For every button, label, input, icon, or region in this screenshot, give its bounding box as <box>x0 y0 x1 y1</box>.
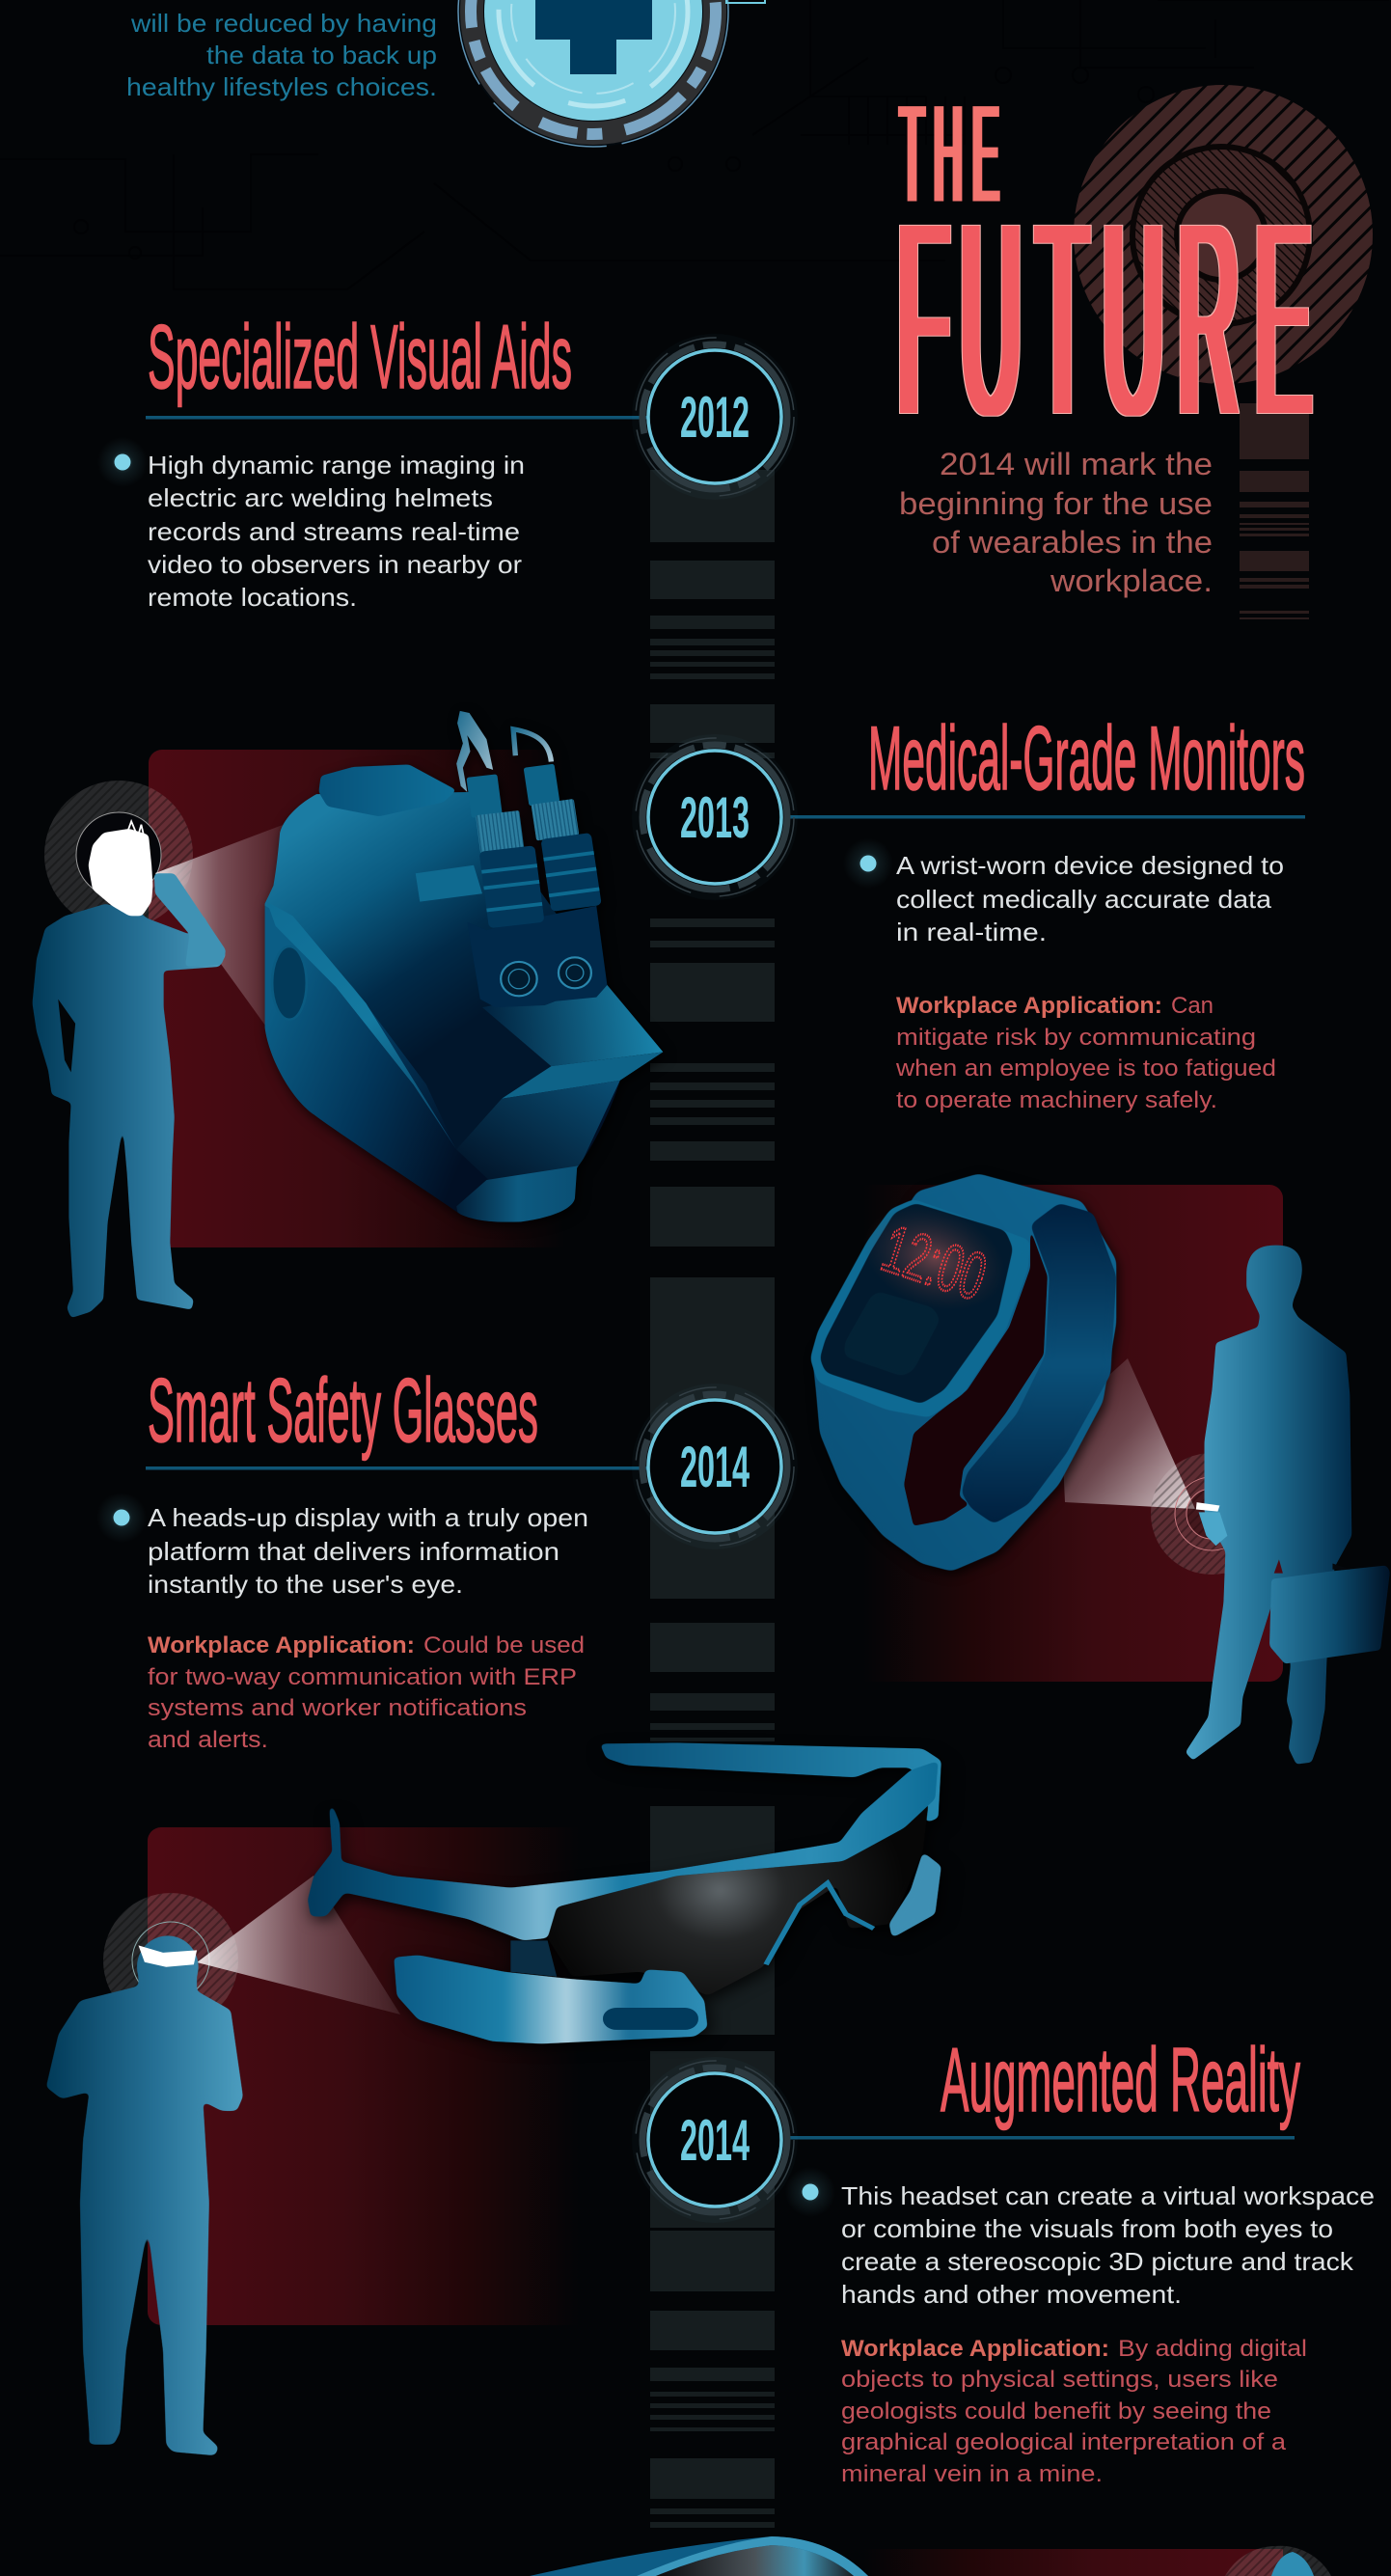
workplace application text: Workplace Application: <box>148 1632 415 1658</box>
body text: instantly to the user's eye. <box>148 1570 463 1599</box>
nose plate <box>482 983 663 1066</box>
panel: bottom red background <box>863 2549 1283 2576</box>
silhouette <box>46 1935 243 2455</box>
display arm <box>394 1955 707 2043</box>
year badge 2014 <box>632 1384 798 1549</box>
workplace application text <box>841 2336 1307 2487</box>
future hatched circle graphic <box>1074 85 1373 384</box>
helmet shell facets <box>259 788 663 1231</box>
section: smart safety glasses <box>96 1359 798 1753</box>
band inner hole <box>904 1228 1048 1526</box>
section: specialized visual aids <box>97 306 798 612</box>
timeline column stripes <box>650 470 775 2528</box>
collar <box>456 1165 579 1226</box>
bullet <box>785 2167 835 2217</box>
section: medical-grade monitors <box>632 707 1305 1113</box>
future intro text: workplace. <box>1050 563 1213 598</box>
watch face <box>820 1203 1013 1404</box>
right cable <box>513 729 551 761</box>
body text: create a stereoscopic 3D picture and track <box>841 2247 1354 2276</box>
light beam to glasses <box>197 1876 400 2014</box>
frame <box>308 1761 939 1940</box>
year badge 2013: 2013 <box>680 785 750 850</box>
light beam to helmet <box>155 825 283 1029</box>
section: smart safety glasses: Smart Safety Glasses <box>148 1359 538 1461</box>
display glow <box>851 1189 1019 1329</box>
lens <box>548 1799 929 1996</box>
workplace application text: Workplace Application: <box>841 2336 1109 2362</box>
body text: remote locations. <box>148 583 357 612</box>
workplace application text: and alerts. <box>148 1727 268 1753</box>
year badge 2013 <box>632 734 798 900</box>
bullet <box>97 437 148 487</box>
body text: hands and other movement. <box>841 2280 1182 2309</box>
panel: glasses red background <box>148 1827 579 2325</box>
top text block: the data to back up <box>206 41 437 69</box>
connector rule <box>786 2136 1295 2140</box>
bracket <box>467 906 607 1007</box>
workplace application text <box>895 993 1276 1113</box>
workplace application text <box>148 1632 585 1753</box>
workplace application text: Workplace Application: <box>896 993 1162 1019</box>
workplace application text: geologists could benefit by seeing the <box>841 2398 1271 2425</box>
person with glasses illustration <box>46 1876 400 2455</box>
workplace application text: objects to physical settings, users like <box>841 2367 1278 2393</box>
future intro text: of wearables in the <box>932 525 1213 560</box>
body text: This headset can create a virtual workspace <box>841 2181 1375 2210</box>
arm slot <box>603 2008 698 2030</box>
body text: platform that delivers information <box>148 1537 559 1566</box>
workplace application text: By adding digital <box>1118 2336 1307 2362</box>
body text: in real-time. <box>896 918 1047 946</box>
panel: watch red background <box>863 1185 1283 1682</box>
body text: electric arc welding helmets <box>148 483 493 512</box>
light beam to watch <box>1061 1358 1195 1509</box>
welding helmet illustration <box>259 711 663 1231</box>
year badge 2014: 2014 <box>680 2108 750 2173</box>
connector rule <box>146 1466 647 1470</box>
side dial <box>272 946 307 1020</box>
person with welding helmet illustration <box>32 781 283 1318</box>
ridge <box>267 902 456 1149</box>
right camera barrel <box>524 760 602 913</box>
body text: High dynamic range imaging in <box>148 451 525 480</box>
chin <box>456 1081 620 1182</box>
year badge 2012 <box>632 334 798 500</box>
body text: A heads-up display with a truly open <box>148 1503 588 1532</box>
safety glasses illustration <box>308 1742 941 2043</box>
focus ring <box>1151 1453 1272 1575</box>
section: augmented reality <box>632 2029 1375 2487</box>
left cable <box>456 711 493 792</box>
strap <box>416 865 482 902</box>
workplace application text: mineral vein in a mine. <box>841 2461 1103 2487</box>
body text: video to observers in nearby or <box>148 550 522 579</box>
body text: collect medically accurate data <box>896 885 1272 914</box>
silhouette <box>32 821 226 1318</box>
workplace application text: for two-way communication with ERP <box>148 1664 577 1690</box>
body text <box>841 2181 1375 2309</box>
nose pad <box>766 1883 874 1964</box>
workplace application text: mitigate risk by communicating <box>896 1025 1256 1051</box>
band far loop <box>962 1203 1116 1524</box>
year badge 2014 <box>632 2057 798 2223</box>
watch case <box>810 1199 1030 1417</box>
body text <box>896 851 1284 946</box>
top text block: healthy lifestyles choices. <box>126 72 437 101</box>
arm connector <box>510 1940 557 1977</box>
year badge 2014: 2014 <box>680 1435 750 1499</box>
title: the future: FUTURE <box>898 165 1311 475</box>
wrist band <box>812 1173 1116 1572</box>
future intro text: 2014 will mark the <box>940 447 1213 481</box>
panel: helmet red background <box>149 750 564 1247</box>
left camera barrel <box>466 771 545 929</box>
right temple piece <box>889 1851 941 1938</box>
year badge 2012: 2012 <box>680 385 750 450</box>
future column stripes <box>1240 403 1309 619</box>
bullet <box>843 838 893 889</box>
connector rule <box>146 416 647 419</box>
title: the future: THE <box>900 78 998 232</box>
sub display <box>845 1292 941 1377</box>
circuit board background pattern <box>0 0 1389 289</box>
top medical badge icon <box>458 0 765 147</box>
body text <box>148 1503 588 1599</box>
bottom person illustration <box>1225 2546 1331 2576</box>
body text <box>148 451 525 612</box>
top text block <box>126 9 437 101</box>
workplace application text: systems and worker notifications <box>148 1695 527 1721</box>
side face <box>259 897 629 1231</box>
body text: or combine the visuals from both eyes to <box>841 2214 1333 2243</box>
workplace application text: Can <box>1171 993 1214 1019</box>
body text: records and streams real-time <box>148 517 520 546</box>
person with watch illustration <box>1151 1246 1390 1765</box>
workplace application text: to operate machinery safely. <box>896 1087 1217 1113</box>
far temple arm <box>600 1742 941 1823</box>
upper face <box>264 792 556 1116</box>
lenses <box>501 957 591 996</box>
top text block: will be reduced by having <box>130 9 437 38</box>
workplace application text: graphical geological interpretation of a <box>841 2429 1287 2455</box>
body text: A wrist-worn device designed to <box>896 851 1284 880</box>
future intro text: beginning for the use <box>899 486 1213 521</box>
workplace application text: when an employee is too fatigued <box>895 1055 1276 1082</box>
time readout: 12:00 <box>874 1211 995 1315</box>
silhouette <box>1186 1246 1390 1765</box>
bullet <box>96 1493 147 1543</box>
focus ring <box>103 1893 238 2028</box>
focus ring behind head <box>44 781 193 929</box>
nose underside <box>502 1052 663 1099</box>
section: specialized visual aids: Specialized Visual Aids <box>148 306 572 407</box>
connector rule <box>786 815 1305 818</box>
hump <box>318 764 456 816</box>
bottom headset illustration <box>530 2536 868 2576</box>
future intro text <box>899 447 1213 598</box>
workplace application text: Could be used <box>423 1632 585 1658</box>
smart watch illustration <box>810 1173 1116 1572</box>
